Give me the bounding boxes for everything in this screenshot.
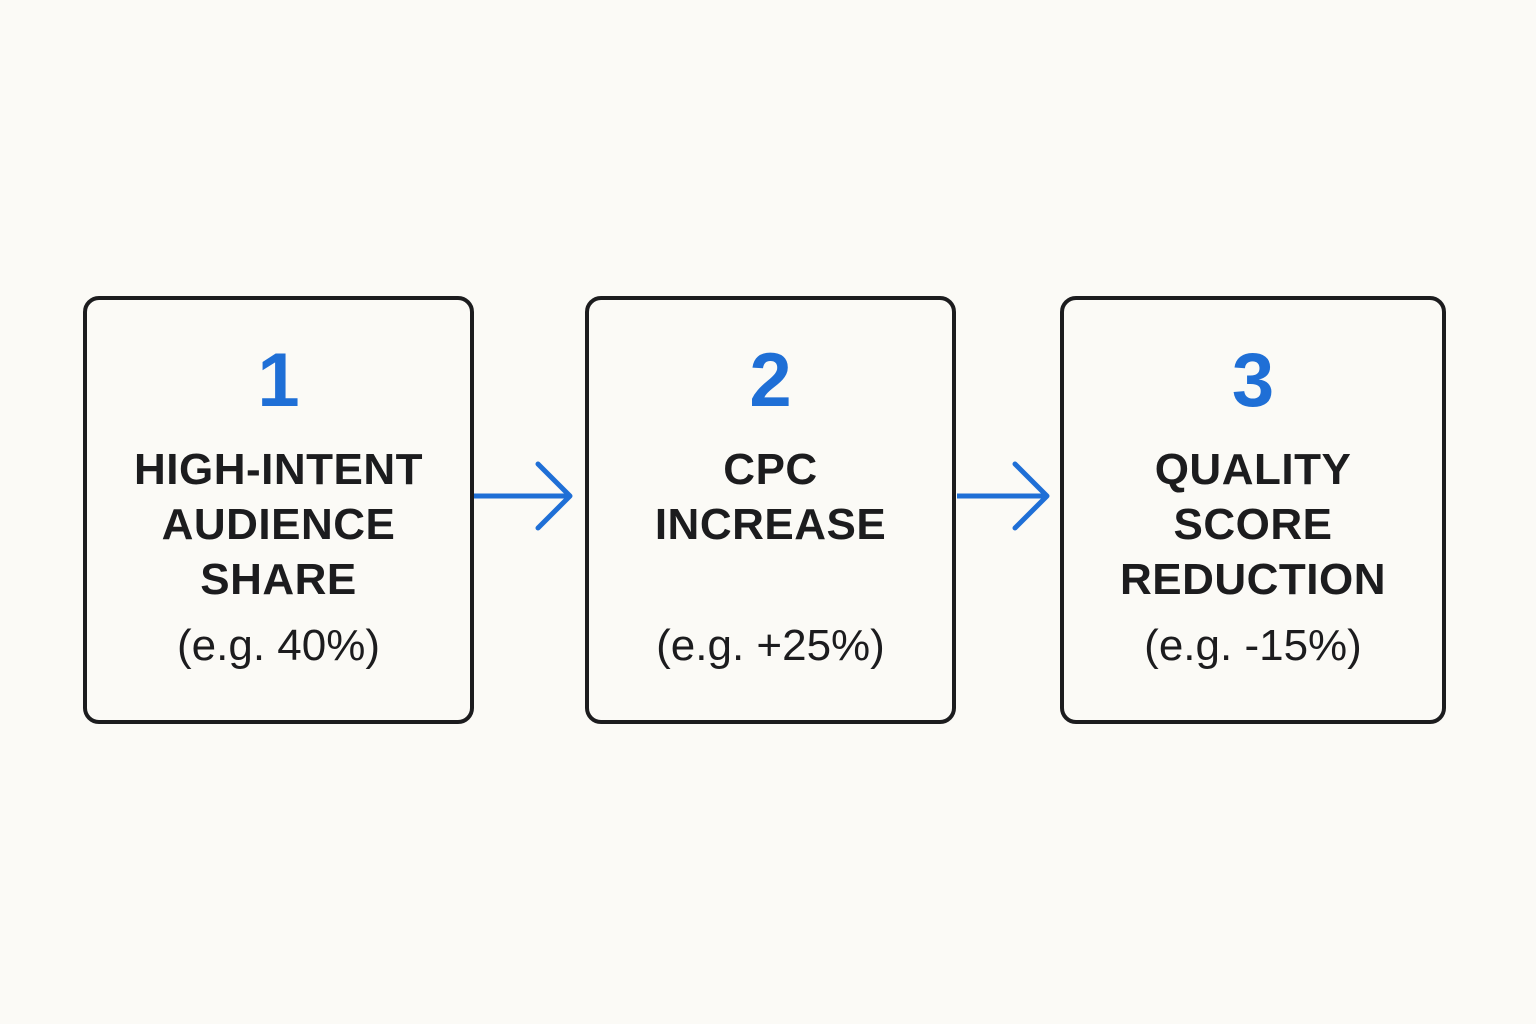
example 1: (e.g. 40%) (177, 621, 380, 670)
column 1 text (134, 338, 423, 670)
box 1 (83, 296, 474, 724)
example 2: (e.g. +25%) (656, 621, 885, 670)
box 2 (585, 296, 956, 724)
heading 1: SHARE (200, 555, 357, 604)
column 3 text (1120, 338, 1386, 670)
heading 1: HIGH-INTENT (134, 445, 423, 494)
number 2: 2 (749, 338, 792, 423)
example 3: (e.g. -15%) (1144, 621, 1362, 670)
heading 2: CPC (723, 445, 818, 494)
heading 3: REDUCTION (1120, 555, 1386, 604)
box 3 (1060, 296, 1446, 724)
heading 1: AUDIENCE (162, 500, 395, 549)
number 1: 1 (257, 338, 300, 423)
column 2 text (655, 338, 886, 670)
arrow 2 (957, 462, 1050, 530)
heading 2: INCREASE (655, 500, 886, 549)
heading 1 (134, 445, 423, 604)
number 3: 3 (1232, 338, 1274, 423)
arrow 1 (474, 462, 572, 530)
heading 3: QUALITY (1155, 445, 1351, 494)
heading 3 (1120, 445, 1386, 604)
heading 2 (655, 445, 886, 549)
heading 3: SCORE (1174, 500, 1332, 549)
